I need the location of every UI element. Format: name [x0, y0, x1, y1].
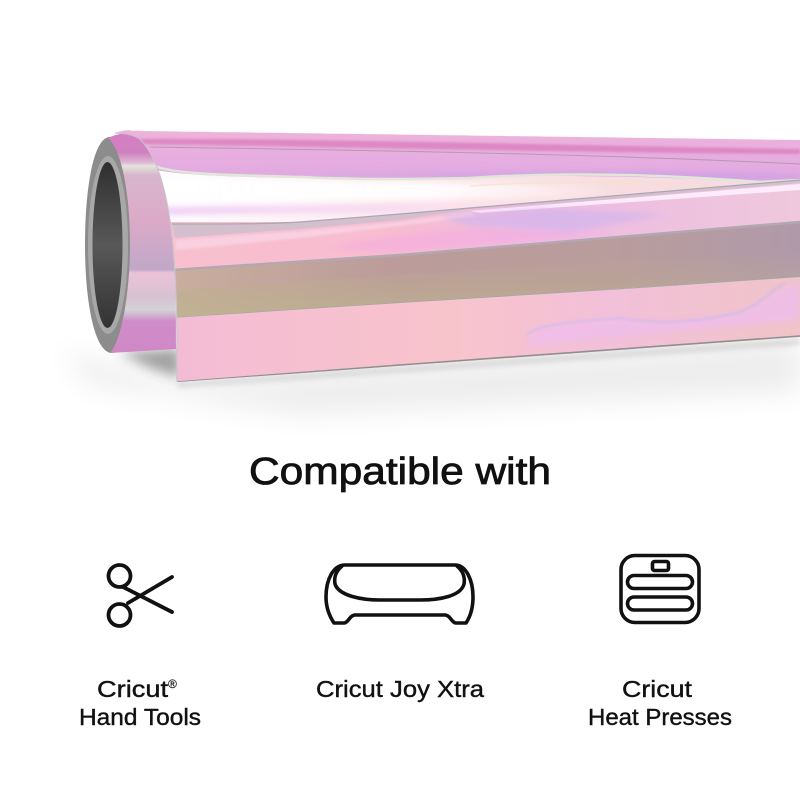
column: Cricut Joy Xtra [316, 565, 484, 702]
label: Cricut Heat Presses: Heat Presses [588, 704, 732, 730]
label: Cricut Hand Tools: Cricut [97, 676, 169, 702]
front sheet with iridescent bands [100, 128, 800, 385]
icon: scissors [108, 565, 172, 626]
label: Cricut Heat Presses: Cricut [622, 676, 693, 702]
icon: Cricut Joy Xtra machine [326, 565, 473, 623]
inner wrapped layer [108, 134, 176, 353]
top lilac region [116, 130, 800, 181]
lower pink region [170, 277, 800, 385]
icon: heat press [621, 556, 699, 622]
infographic [80, 130, 800, 726]
vinyl roll [85, 128, 800, 385]
sheet edge line [115, 133, 177, 382]
beige holographic band [172, 222, 800, 318]
label: Cricut Joy Xtra: Cricut Joy Xtra [316, 676, 484, 702]
grey fold and middle pink band [170, 183, 800, 268]
column: Cricut Heat Presses [588, 556, 732, 730]
column: Cricut Hand Tools [79, 565, 201, 730]
label: Cricut Hand Tools: ® [168, 677, 177, 691]
label: Cricut Hand Tools: Hand Tools [79, 704, 201, 730]
floor shadow [60, 338, 800, 415]
roll end: grey core ring [85, 137, 135, 353]
title: Compatible with [249, 451, 551, 493]
white highlight region [158, 170, 756, 222]
